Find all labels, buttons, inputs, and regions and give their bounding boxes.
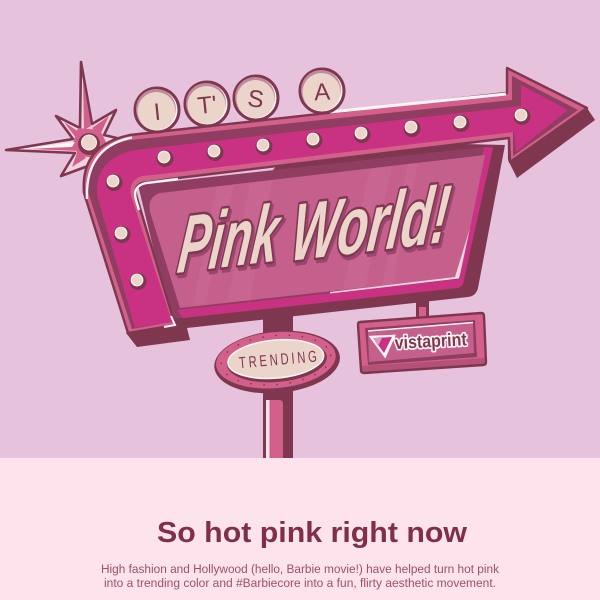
letter balls: IT'S A xyxy=(135,69,344,132)
body text: High fashion and Hollywood (hello, Barbie movie!) have helped turn hot pink xyxy=(101,562,500,576)
body text xyxy=(101,562,500,590)
headline: Pink World!: World! xyxy=(287,168,455,279)
sign back shadow xyxy=(126,140,505,347)
band outer edge xyxy=(84,68,587,333)
marquee bulbs xyxy=(106,108,530,290)
arrow shadow xyxy=(507,68,595,178)
vistaprint sign xyxy=(358,313,486,373)
small post for logo sign xyxy=(416,298,429,320)
body text: into a trending color and #Barbiecore into a fun, flirty aesthetic movement. xyxy=(104,576,496,590)
arrow band xyxy=(84,68,587,333)
band magenta face xyxy=(97,85,568,328)
magenta screen edge xyxy=(177,147,493,318)
white highlights xyxy=(87,138,132,199)
band shaded inner xyxy=(88,76,578,329)
screen highlight xyxy=(330,228,470,294)
trending oval sign xyxy=(212,326,343,398)
trending label: TRENDING xyxy=(238,346,320,372)
letter balls: IT'S A: I xyxy=(153,99,162,126)
letter balls: IT'S A: T' xyxy=(196,91,218,120)
headline: Pink World!: Pink xyxy=(174,187,286,291)
vistaprint logo: vistaprint xyxy=(394,329,467,353)
star burst xyxy=(6,62,125,176)
lower sign post xyxy=(263,300,293,458)
panel: sign screen xyxy=(138,146,493,318)
letter balls: IT'S A: S xyxy=(246,85,266,114)
heading: So hot pink right now xyxy=(157,517,467,549)
star bulb xyxy=(78,133,100,155)
screen reflections xyxy=(193,163,418,305)
bottom caption panel xyxy=(0,458,600,600)
headline: Pink World! xyxy=(174,168,455,291)
letter balls: IT'S A: A xyxy=(313,79,331,106)
screen face xyxy=(149,155,485,308)
